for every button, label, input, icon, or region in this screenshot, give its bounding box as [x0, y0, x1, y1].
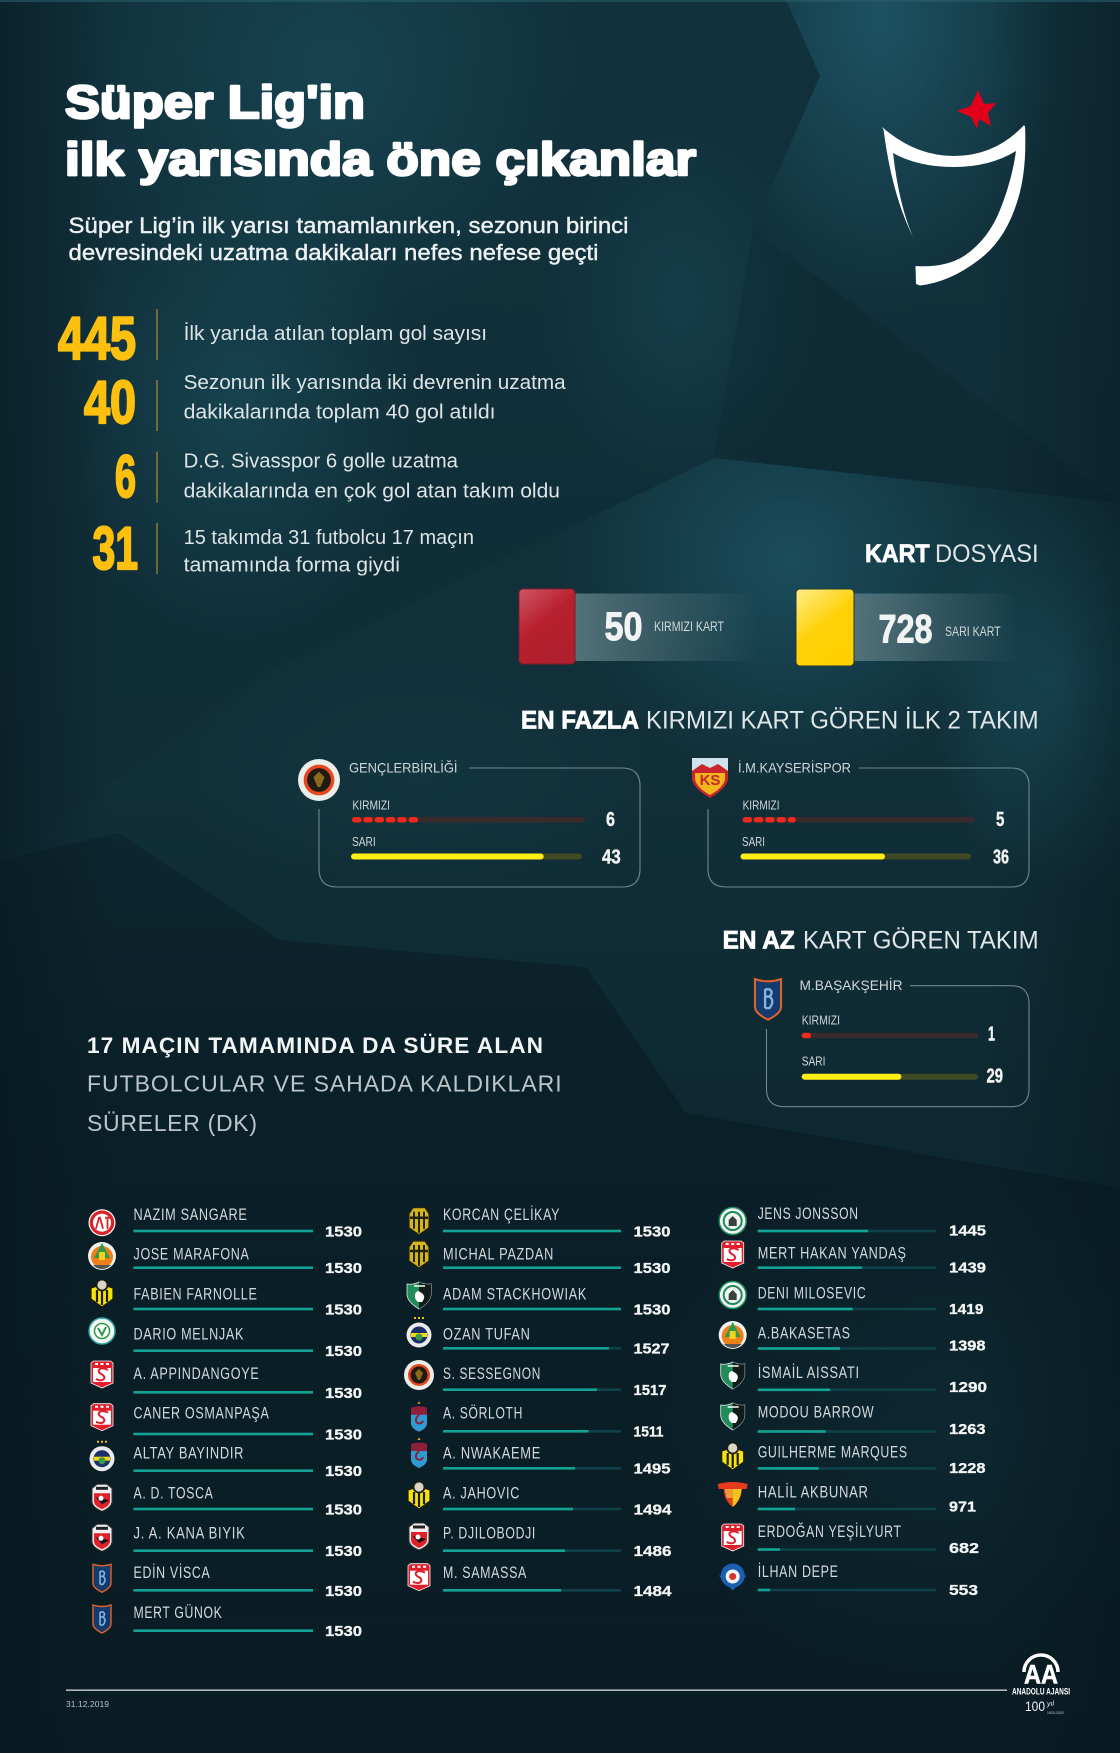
- stat: 31: tamamında forma giydi: [184, 554, 400, 576]
- row: S. Sessegnon: [404, 1360, 666, 1399]
- row: J. A. Kana Bıyık: 1530: [325, 1543, 362, 1560]
- icon: Gençlerbirliği crest: [298, 759, 340, 801]
- row: A. Bakasetas: [719, 1321, 986, 1354]
- title: ilk yarısında öne çıkanlar: [65, 133, 696, 185]
- icon: Başakşehir crest: [755, 979, 781, 1020]
- row: İsmail Aissati: 1290: [949, 1379, 987, 1396]
- icon: Anadolu Ajansı logo: 1920-2020: [1047, 1711, 1064, 1715]
- panel: M.Başakşehir: 29: [986, 1066, 1003, 1088]
- row: Ozan Tufan: 1527: [634, 1340, 670, 1358]
- row: Korcan Çelikay: KORCAN ÇELİKAY: [443, 1205, 560, 1224]
- icon: Anadolu Ajansı logo: ANADOLU AJANSI: [1012, 1686, 1070, 1696]
- stat: 31: 31: [92, 515, 138, 582]
- column 1: players: [88, 1206, 362, 1640]
- row: İsmail Aissati: [721, 1362, 987, 1396]
- row: Caner Osmanpaşa: CANER OSMANPAŞA: [134, 1405, 270, 1423]
- heading: en az kart: KART GÖREN TAKIM: [803, 927, 1039, 955]
- row: Dario Melnjak: DARIO MELNJAK: [134, 1325, 244, 1343]
- stat: 445: [58, 305, 487, 372]
- stat: 40: [84, 369, 566, 436]
- red card total: KIRMIZI KART: [654, 618, 724, 634]
- stat: 31: [92, 515, 474, 582]
- stat: 31: 15 takımda 31 futbolcu 17 maçın: [184, 527, 474, 549]
- heading: en az kart: EN AZ: [723, 927, 795, 955]
- icon: Kayserispor crest: [692, 758, 728, 798]
- bar: yellow 36: [740, 854, 971, 860]
- row: M. Samassa: M. SAMASSA: [443, 1564, 527, 1582]
- row: Jose Marafona: JOSE MARAFONA: [134, 1246, 250, 1264]
- row: Caner Osmanpaşa: 1530: [325, 1426, 362, 1444]
- row: A. Nwakaeme: 1495: [634, 1460, 670, 1478]
- row: Nazım Sangare: NAZIM SANGARE: [134, 1206, 248, 1224]
- yellow card total: [796, 589, 1019, 666]
- row: M. Samassa: 1484: [634, 1583, 672, 1600]
- row: Jose Marafona: [88, 1242, 362, 1277]
- row: A. Sörloth: [411, 1401, 664, 1440]
- icon: Kayserispor crest: KS: [700, 772, 720, 789]
- bar: yellow 29: [802, 1074, 978, 1080]
- row: A. Appindangoye: 1530: [325, 1385, 362, 1402]
- panel: Gençlerbirliği: SARI: [352, 834, 376, 849]
- row: Mert Hakan Yandaş: 1439: [949, 1259, 986, 1276]
- row: İlhan Depe: İLHAN DEPE: [758, 1562, 839, 1581]
- row: Caner Osmanpaşa: [91, 1404, 362, 1444]
- row: Altay Bayındır: ALTAY BAYINDIR: [134, 1445, 244, 1463]
- row: Nazım Sangare: 1530: [325, 1224, 362, 1240]
- row: A. Nwakaeme: [411, 1438, 670, 1478]
- row: Michal Pazdan: [409, 1241, 670, 1277]
- heading: kart dosyası: KART: [865, 540, 930, 568]
- icon: red card: [519, 589, 575, 664]
- panel: M.Başakşehir: KIRMIZI: [802, 1012, 840, 1027]
- subtitle: Süper Lig’in ilk yarısı tamamlanırken, sezonun birinci: [68, 213, 628, 238]
- row: İlhan Depe: 553: [949, 1582, 978, 1599]
- row: Michal Pazdan: 1530: [634, 1260, 670, 1277]
- row: Altay Bayındır: [90, 1442, 362, 1480]
- stat: 40: Sezonun ilk yarısında iki devrenin uzatma: [184, 372, 566, 394]
- row: Adam Stachowiak: [407, 1282, 670, 1318]
- column 2: players: [404, 1205, 672, 1600]
- row: Adam Stachowiak: ADAM STACKHOWIAK: [443, 1286, 587, 1304]
- row: Jens Jonsson: JENS JONSSON: [758, 1205, 859, 1223]
- panel: M.Başakşehir: M.BAŞAKŞEHİR: [800, 976, 902, 993]
- bar: red 6: [352, 817, 585, 822]
- row: Korcan Çelikay: [409, 1205, 670, 1240]
- yellow card total: 728: [878, 608, 932, 652]
- row: Nazım Sangare: [88, 1206, 362, 1240]
- panel: M.Başakşehir: [755, 976, 1029, 1107]
- row: İsmail Aissati: İSMAİL AISSATI: [758, 1363, 860, 1382]
- panel: Gençlerbirliği: 43: [602, 847, 621, 869]
- row: S. Sessegnon: 1517: [634, 1382, 666, 1399]
- row: P. Djilobodji: [409, 1523, 672, 1560]
- date: 31.12.2019: [66, 1699, 109, 1709]
- row: Edin Visca: 1530: [325, 1583, 362, 1600]
- icon: Anadolu Ajansı logo: yıl: [1046, 1701, 1054, 1708]
- stat: 445: 445: [58, 305, 136, 372]
- heading: players list: FUTBOLCULAR VE SAHADA KALDIKLARI: [87, 1071, 562, 1097]
- row: Deni Milosevic: 1419: [949, 1301, 984, 1318]
- row: J. A. Kana Bıyık: [92, 1524, 362, 1560]
- row: Mert Günok: [93, 1604, 362, 1640]
- row: Adam Stachowiak: 1530: [634, 1302, 670, 1318]
- icon: yellow card: [796, 589, 854, 666]
- row: A. Bakasetas: 1398: [949, 1338, 986, 1354]
- row: A. Jahovic: A. JAHOVIC: [443, 1484, 520, 1502]
- row: Ozan Tufan: [406, 1318, 670, 1358]
- row: A. Appindangoye: [91, 1361, 362, 1402]
- stat: 445: İlk yarıda atılan toplam gol sayısı: [184, 322, 487, 345]
- bar: red 1: [802, 1033, 978, 1038]
- row: Jose Marafona: 1530: [325, 1260, 362, 1277]
- row: A. Sörloth: A. SÖRLOTH: [443, 1405, 523, 1423]
- stat: 6: 6: [115, 443, 136, 510]
- row: Modou Barrow: [721, 1403, 986, 1438]
- title: [65, 76, 696, 185]
- heading: players list: [87, 1033, 562, 1136]
- bar: yellow 43: [351, 854, 582, 860]
- row: A. Bakasetas: A.BAKASETAS: [758, 1324, 851, 1342]
- row: A. D. Tosca: 1530: [325, 1502, 362, 1518]
- row: Dario Melnjak: 1530: [325, 1343, 362, 1360]
- stat: 40: 40: [84, 369, 136, 436]
- panel: Gençlerbirliği: GENÇLERBİRLİĞİ: [349, 759, 458, 776]
- row: İlhan Depe: [719, 1562, 978, 1599]
- panel: İ.M.Kayserispor: KIRMIZI: [743, 798, 780, 813]
- row: J. A. Kana Bıyık: J. A. KANA BIYIK: [134, 1524, 246, 1542]
- row: Erdoğan Yeşilyurt: 682: [949, 1540, 979, 1557]
- icon: Anadolu Ajansı logo: AA: [1024, 1660, 1058, 1690]
- stat: 6: [115, 443, 560, 510]
- row: S. Sessegnon: S. SESSEGNON: [443, 1365, 541, 1383]
- row: Fabien Farnolle: FABIEN FARNOLLE: [134, 1286, 258, 1304]
- row: M. Samassa: [408, 1564, 672, 1600]
- subtitle: [68, 213, 628, 265]
- row: Jens Jonsson: [719, 1205, 986, 1240]
- row: Ozan Tufan: OZAN TUFAN: [443, 1325, 530, 1343]
- row: Guilherme Marques: GUILHERME MARQUES: [758, 1444, 908, 1462]
- row: Erdoğan Yeşilyurt: ERDOĞAN YEŞİLYURT: [758, 1522, 902, 1541]
- red card total: 50: [604, 605, 642, 649]
- stat: 40: dakikalarında toplam 40 gol atıldı: [184, 402, 496, 424]
- row: Altay Bayındır: 1530: [325, 1463, 362, 1480]
- footer rule: [66, 1690, 1007, 1691]
- row: A. Jahovic: 1494: [634, 1502, 672, 1518]
- icon: Süper Lig logo: [882, 90, 1025, 286]
- row: Halil Akbunar: HALİL AKBUNAR: [758, 1482, 869, 1501]
- yellow card total: SARI KART: [945, 623, 1001, 639]
- icon: Anadolu Ajansı logo: 100: [1025, 1698, 1045, 1714]
- panel: Gençlerbirliği: 6: [606, 809, 615, 831]
- panel: İ.M.Kayserispor: SARI: [742, 834, 765, 849]
- row: A. Nwakaeme: A. NWAKAEME: [443, 1445, 541, 1463]
- row: Mert Günok: 1530: [325, 1623, 362, 1640]
- panel: İ.M.Kayserispor: [692, 758, 1029, 887]
- panel: M.Başakşehir: SARI: [802, 1053, 826, 1068]
- panel: İ.M.Kayserispor: İ.M.KAYSERİSPOR: [738, 759, 851, 776]
- row: Dario Melnjak: [89, 1318, 362, 1360]
- row: Jens Jonsson: 1445: [949, 1223, 986, 1240]
- row: Michal Pazdan: MICHAL PAZDAN: [443, 1246, 554, 1264]
- heading: players list: SÜRELER (DK): [87, 1110, 257, 1136]
- stat: 6: dakikalarında en çok gol atan takım oldu: [184, 480, 560, 502]
- title: Süper Lig'in: [65, 76, 365, 128]
- row: P. Djilobodji: 1486: [634, 1543, 672, 1560]
- heading: en fazla kırmızı kart: KIRMIZI KART GÖREN İLK 2 TAKIM: [646, 706, 1039, 735]
- row: A. D. Tosca: A. D. TOSCA: [134, 1484, 214, 1502]
- row: Mert Günok: MERT GÜNOK: [134, 1604, 222, 1622]
- row: A. D. Tosca: [92, 1484, 362, 1518]
- heading: kart dosyası: DOSYASI: [935, 540, 1039, 568]
- subtitle: devresindeki uzatma dakikaları nefes nefese geçti: [68, 240, 598, 265]
- heading: en fazla kırmızı kart: EN FAZLA: [521, 707, 639, 735]
- panel: M.Başakşehir: 1: [988, 1024, 995, 1046]
- row: Edin Visca: [93, 1563, 362, 1600]
- red card total: [519, 589, 760, 664]
- row: Erdoğan Yeşilyurt: [722, 1522, 979, 1557]
- icon: Anadolu Ajansı logo: [1012, 1655, 1070, 1715]
- row: Halil Akbunar: 971: [949, 1498, 976, 1515]
- stat: 6: D.G. Sivasspor 6 golle uzatma: [184, 451, 459, 473]
- row: Modou Barrow: 1263: [949, 1421, 986, 1438]
- row: Deni Milosevic: [719, 1282, 984, 1318]
- row: Mert Hakan Yandaş: MERT HAKAN YANDAŞ: [758, 1245, 907, 1263]
- panel: Gençlerbirliği: [298, 759, 640, 887]
- row: A. Appindangoye: A. APPINDANGOYE: [134, 1365, 260, 1383]
- column 3: players: [718, 1205, 987, 1599]
- row: Fabien Farnolle: 1530: [325, 1302, 362, 1318]
- row: Korcan Çelikay: 1530: [634, 1224, 670, 1240]
- row: Guilherme Marques: [722, 1442, 986, 1477]
- row: A. Sörloth: 1511: [634, 1424, 664, 1440]
- row: Mert Hakan Yandaş: [722, 1241, 986, 1276]
- panel: Gençlerbirliği: KIRMIZI: [352, 798, 390, 813]
- row: Fabien Farnolle: [91, 1280, 362, 1318]
- panel: İ.M.Kayserispor: 36: [993, 847, 1009, 869]
- heading: players list: 17 MAÇIN TAMAMINDA DA SÜRE ALAN: [87, 1033, 544, 1058]
- bar: red 5: [743, 817, 975, 822]
- panel: İ.M.Kayserispor: 5: [996, 809, 1004, 831]
- row: A. Jahovic: [408, 1482, 672, 1518]
- row: Guilherme Marques: 1228: [949, 1460, 986, 1477]
- row: Deni Milosevic: DENI MILOSEVIC: [758, 1285, 866, 1303]
- row: Edin Visca: EDİN VİSCA: [134, 1563, 210, 1582]
- heading: kart dosyası: [865, 540, 1039, 568]
- row: P. Djilobodji: P. DJILOBODJI: [443, 1524, 536, 1542]
- row: Modou Barrow: MODOU BARROW: [758, 1404, 874, 1422]
- row: Halil Akbunar: [718, 1482, 976, 1515]
